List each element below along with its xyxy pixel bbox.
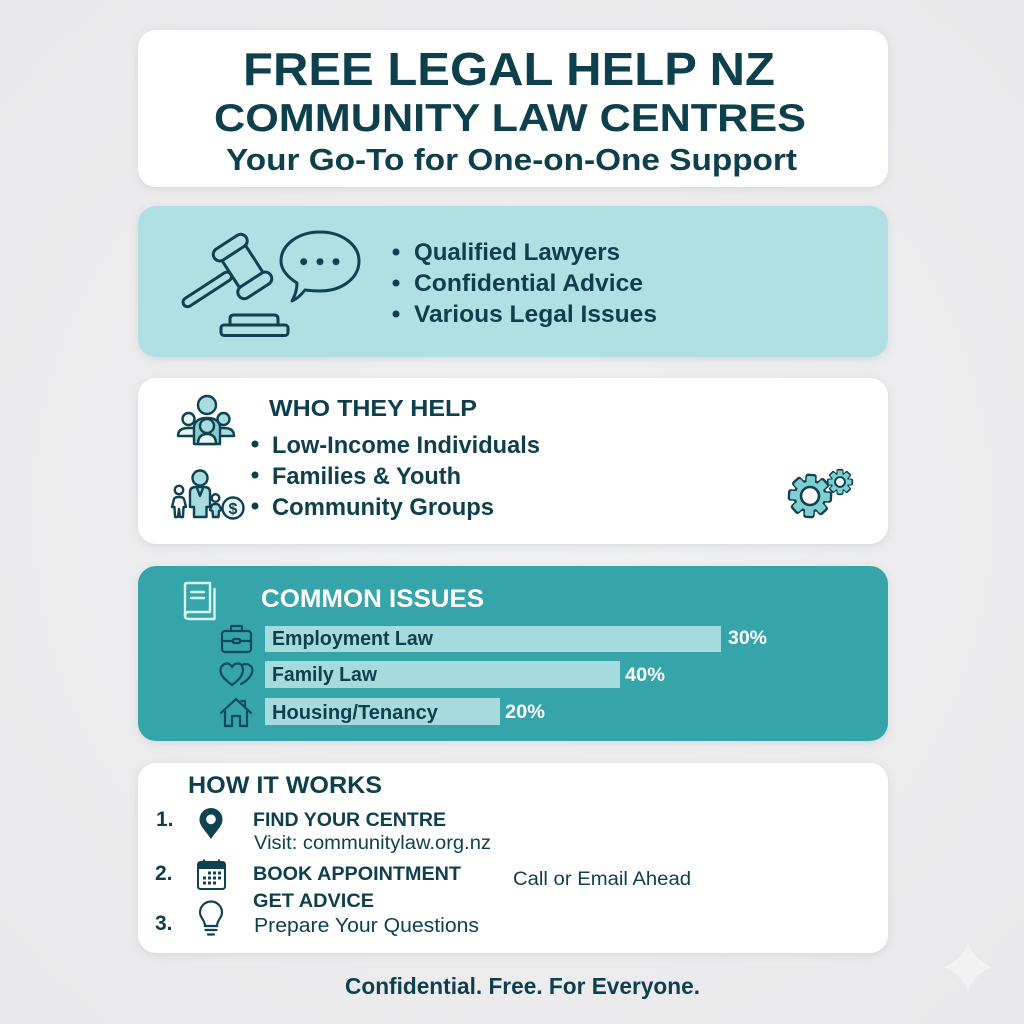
- icon: calendar: [198, 860, 225, 889]
- panel: how it works: [138, 763, 888, 953]
- heading: common issues: COMMON ISSUES: [261, 585, 484, 613]
- bullet list: who they help: Families & Youth: [272, 463, 461, 490]
- footer tagline: Confidential. Free. For Everyone.: [345, 973, 700, 999]
- step 3: 3.: [155, 912, 173, 935]
- panel: common issues: [138, 566, 888, 741]
- icon: family with dollar coin: [172, 470, 244, 518]
- step 2: 2.: [155, 862, 173, 885]
- bar: employment law: 30%: [728, 628, 767, 649]
- panel: title: [138, 30, 888, 187]
- icon: briefcase: [222, 626, 251, 652]
- bar: employment law: Employment Law: [272, 628, 433, 650]
- panel: who they help: [138, 378, 888, 544]
- icon: book: [185, 583, 214, 619]
- title line 2: COMMUNITY LAW CENTRES: [214, 97, 806, 140]
- step 2: [155, 860, 691, 890]
- bar chart: common issues: [265, 626, 767, 725]
- bar: housing/tenancy: 20%: [505, 702, 545, 723]
- bar: housing/tenancy: [265, 698, 545, 725]
- bar: housing/tenancy: Housing/Tenancy: [272, 702, 439, 724]
- bar: family law: Family Law: [272, 664, 377, 686]
- icon: sparkle: [944, 943, 992, 992]
- icon: family with dollar coin: $: [229, 501, 238, 518]
- step 1: Visit: communitylaw.org.nz: [254, 833, 491, 854]
- heading: who they help: WHO THEY HELP: [269, 395, 477, 421]
- icon: map pin: [200, 808, 222, 839]
- bullet list: who they help: Low-Income Individuals: [272, 432, 540, 459]
- bullet list: services: [392, 239, 657, 328]
- icon: house: [221, 699, 251, 726]
- subtitle: Your Go-To for One-on-One Support: [226, 142, 797, 177]
- icon: light bulb: [200, 902, 222, 934]
- step 1: FIND YOUR CENTRE: [253, 810, 446, 831]
- bullet list: services: Qualified Lawyers: [414, 239, 620, 266]
- icon: gavel: [168, 232, 288, 336]
- bullet list: services: Various Legal Issues: [414, 301, 657, 328]
- bullet list: who they help: [252, 432, 540, 521]
- panel: services: [138, 206, 888, 357]
- step 2: BOOK APPOINTMENT: [253, 864, 461, 885]
- icon: gears: [788, 470, 852, 518]
- title line 1: FREE LEGAL HELP NZ: [243, 43, 775, 95]
- step 3: [155, 891, 479, 937]
- step 3: Prepare Your Questions: [254, 915, 479, 937]
- bar: family law: [265, 661, 665, 688]
- bullet list: services: Confidential Advice: [414, 270, 643, 297]
- step 1: [156, 808, 491, 854]
- step 1: 1.: [156, 808, 174, 831]
- icon: hearts: [220, 664, 252, 685]
- bar: employment law: [265, 626, 767, 652]
- note: call or email: Call or Email Ahead: [513, 869, 691, 890]
- icon: group of people: [178, 396, 234, 444]
- bar: family law: 40%: [625, 665, 665, 686]
- heading: how it works: HOW IT WORKS: [188, 772, 382, 799]
- icon: speech bubble: [281, 232, 359, 301]
- step 3: GET ADVICE: [253, 891, 374, 912]
- bullet list: who they help: Community Groups: [272, 494, 494, 521]
